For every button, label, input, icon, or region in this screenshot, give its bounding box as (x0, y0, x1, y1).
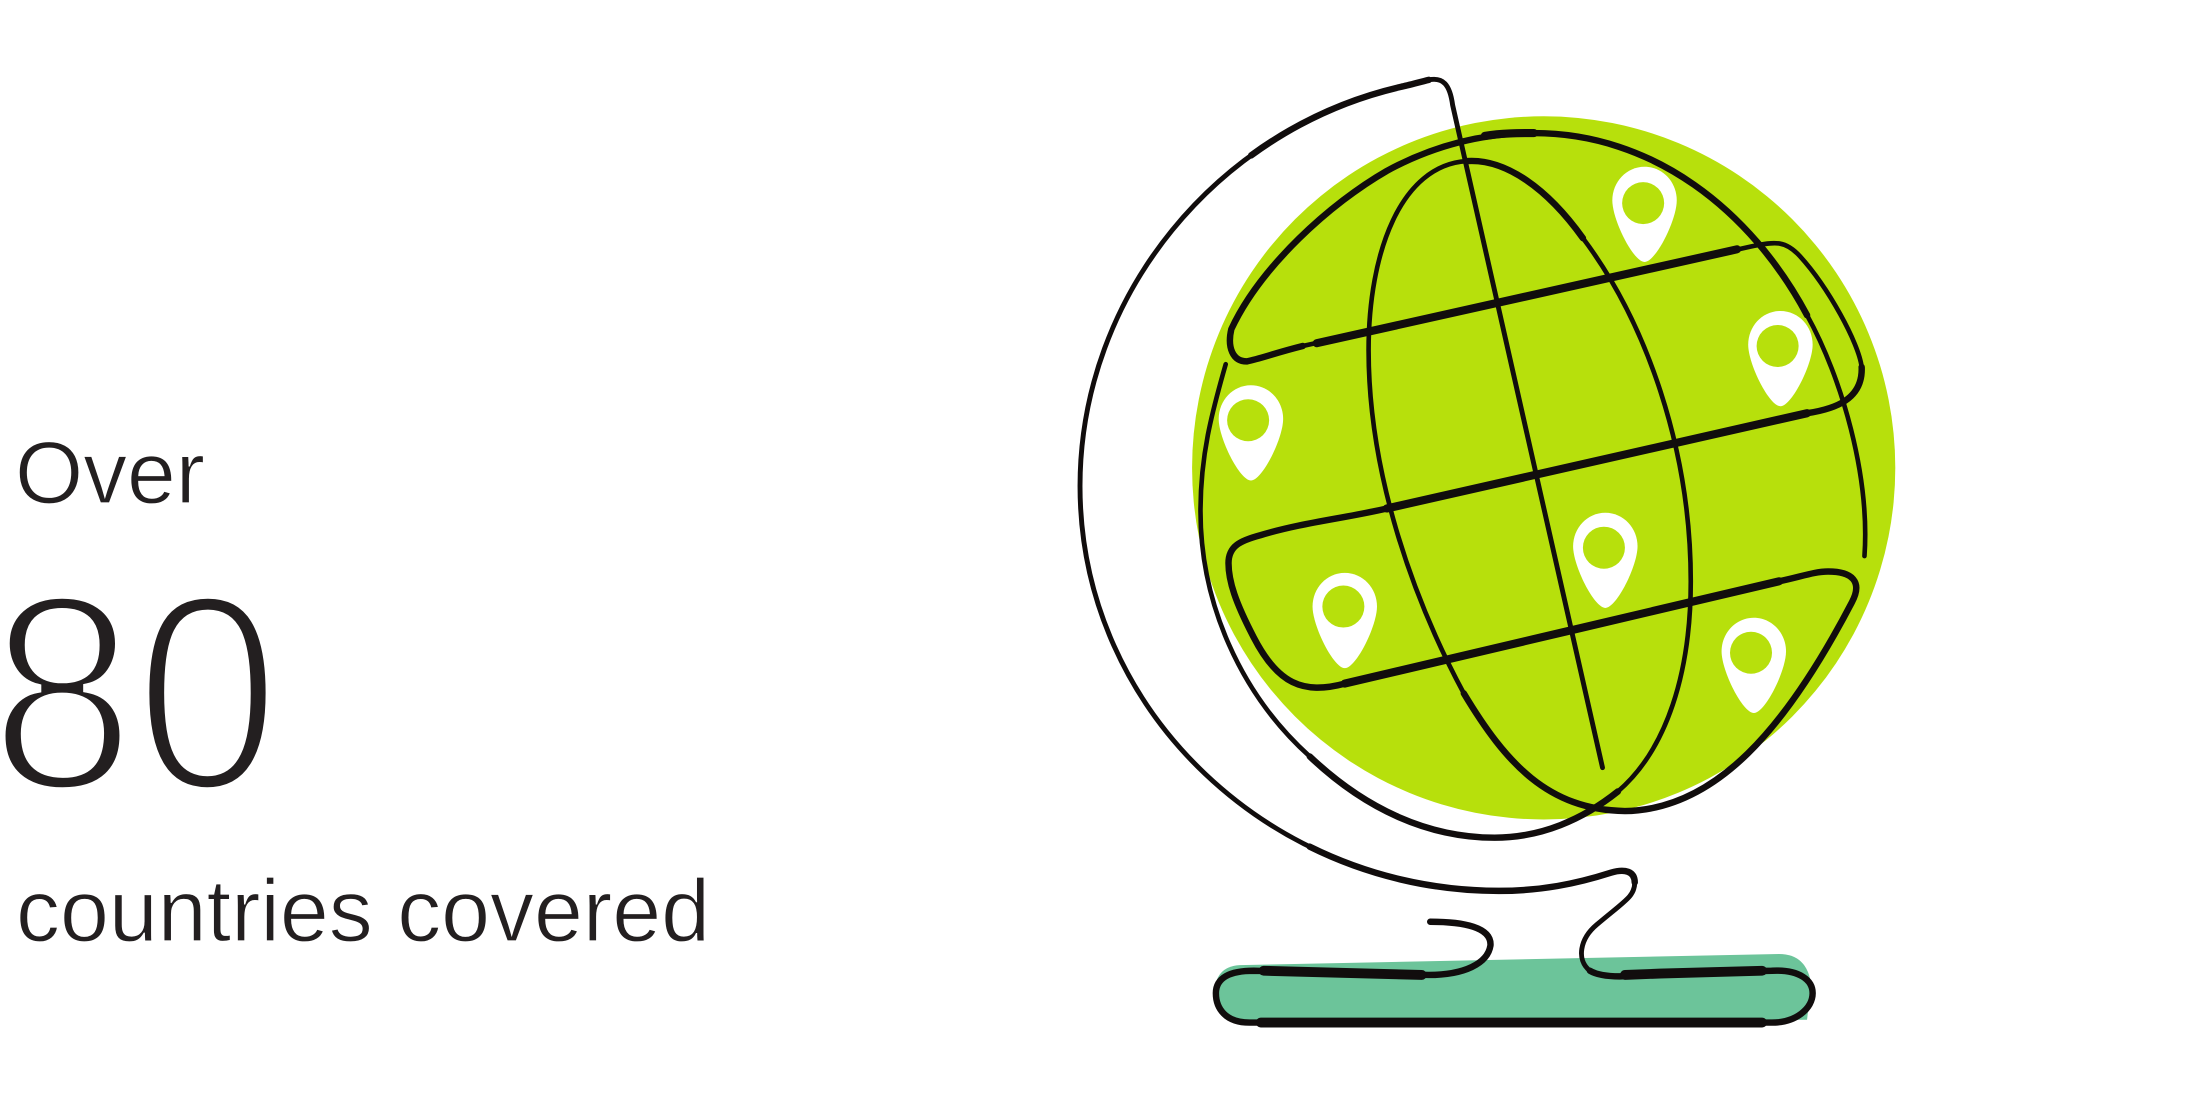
stat text block (0, 423, 710, 960)
globe grid line (1200, 133, 1865, 838)
pin 3 (1219, 385, 1283, 480)
base thick accents (1261, 971, 1762, 1023)
pin 1 (1612, 167, 1677, 262)
green globe circle (1192, 116, 1895, 819)
medium line accents (1216, 80, 1862, 1023)
pin 4 (1573, 513, 1638, 608)
thick line accents (1317, 133, 1807, 684)
pin 5 (1313, 573, 1377, 668)
globe illustration (1080, 79, 1895, 1024)
pin 6 (1722, 618, 1786, 713)
globe stand line (1080, 79, 1813, 1023)
text: Over: Over (15, 423, 205, 522)
location pins (1219, 167, 1813, 713)
text: countries covered: countries covered (16, 861, 710, 960)
green base shape (1214, 954, 1811, 1024)
pin 2 (1748, 311, 1813, 406)
